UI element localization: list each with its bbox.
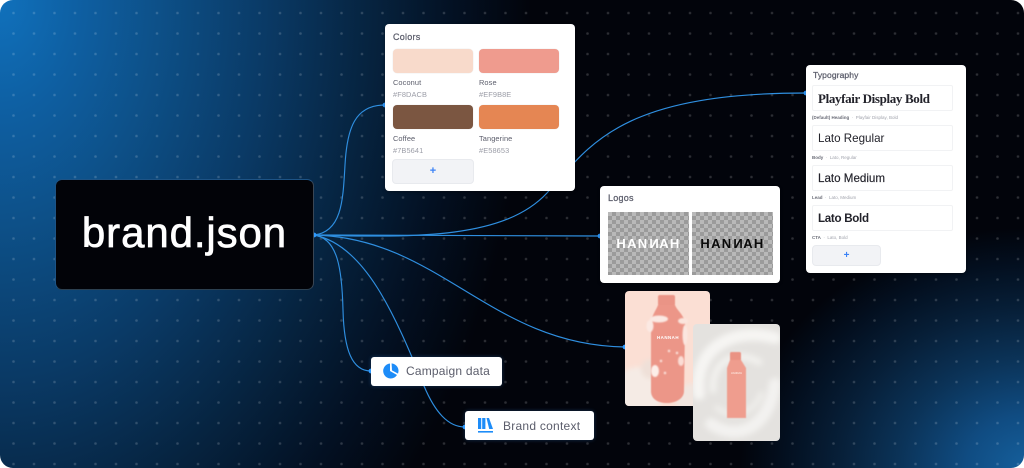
pill: brand context (465, 411, 594, 440)
font sample: lato bold: Lato Bold (818, 212, 869, 225)
label: rose: #EF9B8E (479, 90, 511, 99)
logo: white (608, 212, 689, 275)
typography heading: Typography (813, 70, 858, 80)
brand.json box (55, 179, 314, 290)
font sample: playfair (812, 85, 953, 111)
panel: typography (806, 65, 966, 273)
swatch: tangerine (479, 105, 559, 129)
label: tangerine (479, 134, 512, 155)
label: rose: Rose (479, 78, 497, 87)
black wordmark: HAN AH (700, 236, 765, 251)
label: tangerine: Tangerine (479, 134, 512, 143)
font sample: lato regular (812, 125, 953, 151)
font sample: playfair: Playfair Display Bold (818, 91, 930, 106)
caption: cta: CTA · Lato, Bold (812, 235, 848, 240)
brand.json title: brand.json (82, 209, 287, 256)
label: coffee (393, 134, 423, 155)
caption: lead: Lead · Lato, Medium (812, 195, 856, 200)
logos heading: Logos (608, 193, 634, 203)
font sample: lato medium: Lato Medium (818, 172, 885, 185)
caption: heading: (Default) Heading · Playfair Display, Bold (812, 115, 898, 120)
label: coffee: Coffee (393, 134, 415, 143)
panel: colors (385, 24, 575, 191)
add font button: + (844, 250, 849, 261)
photo: bottle on white foam: HANNAH (731, 371, 742, 375)
label: coconut: #F8DACB (393, 90, 427, 99)
logo: black (692, 212, 773, 275)
font sample: lato regular: Lato Regular (818, 132, 884, 145)
photo: bottle in foam, pink background (625, 291, 710, 406)
label: tangerine: #E58653 (479, 146, 509, 155)
panel: logos (600, 186, 780, 283)
icon: brand context (478, 418, 493, 433)
swatch: rose (479, 49, 559, 73)
caption: body: Body · Lato, Regular (812, 155, 857, 160)
photo: bottle in foam, pink background: HANNAH (657, 335, 679, 340)
font sample: lato medium (812, 165, 953, 191)
add colour button (392, 159, 474, 184)
label: brand context: Brand context (503, 419, 580, 433)
photo: bottle on white foam (693, 324, 780, 441)
label: rose (479, 78, 511, 99)
white wordmark: HAN AH (616, 236, 681, 251)
add colour button: + (430, 165, 436, 177)
pill: campaign data (371, 356, 502, 386)
label: campaign data: Campaign data (406, 364, 490, 378)
colors heading: Colors (393, 32, 421, 42)
add font button (812, 245, 881, 266)
label: coconut (393, 78, 427, 99)
swatch: coconut (393, 49, 473, 73)
black wordmark: N (732, 236, 743, 251)
label: coffee: #7B5641 (393, 146, 423, 155)
label: coconut: Coconut (393, 78, 421, 87)
swatch: coffee (393, 105, 473, 129)
font sample: lato bold (812, 205, 953, 231)
icon: pie chart (383, 363, 398, 378)
white wordmark: N (648, 236, 659, 251)
